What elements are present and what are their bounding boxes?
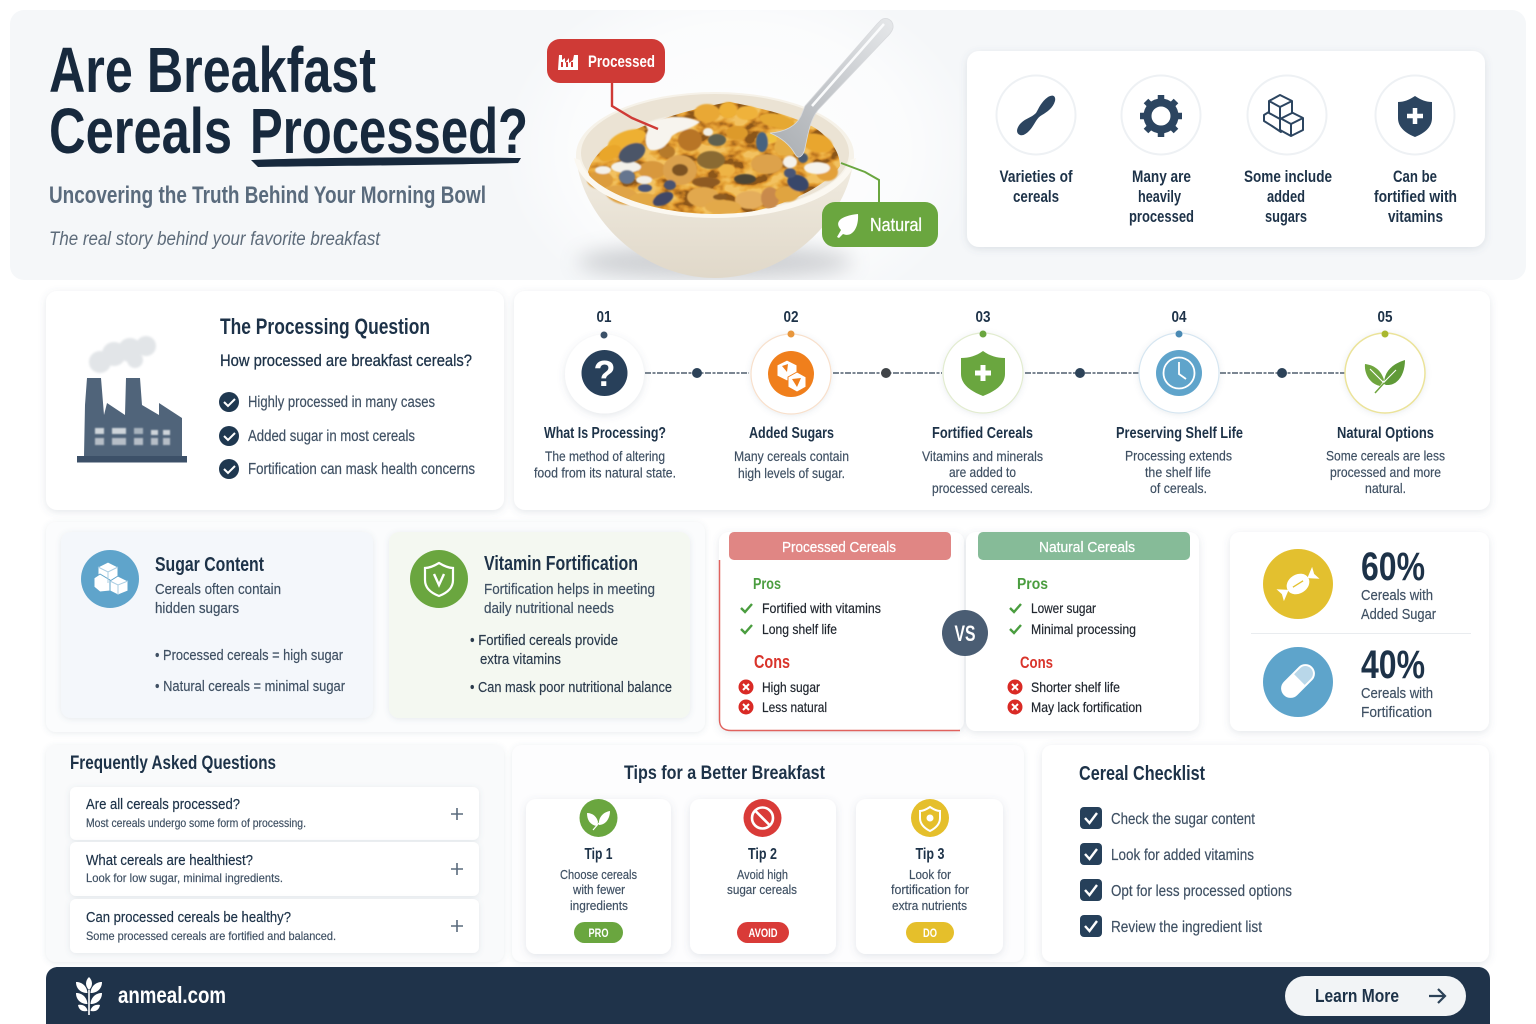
card: processed cereals: Pros: [753, 576, 781, 593]
hero panel: [10, 10, 1526, 280]
faq item 2: What cereals are healthiest?: [86, 852, 253, 869]
fact: added sugars: Some include: [1244, 168, 1332, 186]
check item 3: [1080, 879, 1292, 901]
connectors: [645, 368, 1345, 378]
stat: 60 percent: 60%: [1361, 545, 1425, 589]
step 02: 02: [784, 309, 799, 326]
tagline: The real story behind your favorite breakfast: [49, 229, 381, 250]
tip 3: [856, 799, 1003, 954]
panel: process timeline: [514, 291, 1490, 510]
card: vitamin fortification: Vitamin Fortification: [484, 553, 638, 575]
tip 1: with fewer: [572, 882, 626, 897]
icon: factory with smoke: [77, 336, 187, 462]
fact: added sugars: added: [1267, 188, 1305, 206]
panel: sugar and vitamins backdrop: [46, 522, 705, 732]
VS badge: [942, 610, 988, 656]
tip 1: PRO: [588, 926, 608, 940]
step 03: are added to: [949, 464, 1016, 480]
title: Processed?: [250, 95, 528, 167]
tip 1: ingredients: [570, 898, 628, 913]
panel: cereal checklist: [1042, 745, 1489, 962]
tip 1: Choose cereals: [560, 867, 637, 882]
step 05: [1326, 309, 1445, 496]
card: processed cereals: Cons: [754, 652, 790, 672]
faq item 3: Can processed cereals be healthy?: [86, 909, 291, 926]
tip 3: DO: [923, 926, 937, 940]
card: vitamin fortification: • Can mask poor nutritional balance: [470, 679, 672, 696]
check item 1: [1080, 807, 1255, 829]
step 03: [922, 309, 1043, 496]
check item 4: [1080, 915, 1262, 937]
panel: cereal checklist: Cereal Checklist: [1079, 763, 1205, 785]
stat: 40 percent: Fortification: [1361, 704, 1432, 721]
card: vitamin fortification: [389, 532, 690, 718]
fact: varieties: [996, 76, 1076, 206]
stat: 60 percent: Added Sugar: [1361, 606, 1436, 623]
step 01: [534, 309, 676, 480]
check item 1: Check the sugar content: [1111, 811, 1255, 828]
heading: The Processing Question: [220, 314, 430, 339]
faq item 2: [70, 842, 479, 896]
faq item 3: Some processed cereals are fortified and balanced.: [86, 929, 336, 943]
panel: FAQ: [46, 745, 504, 962]
card: sugar content: [61, 532, 373, 718]
card: vitamin fortification: • Fortified cereals provide: [470, 632, 618, 649]
callout: processed: Processed: [588, 52, 655, 71]
fact: heavily processed: processed: [1129, 208, 1194, 226]
step 02: Added Sugars: [749, 425, 834, 442]
step 01: ?: [594, 353, 616, 394]
callout line: processed: [612, 83, 658, 129]
step 05: natural.: [1365, 480, 1406, 496]
tip 3: Tip 3: [916, 846, 945, 863]
tip 3: fortification for: [891, 882, 970, 897]
card: sugar content: Cereals often contain: [155, 581, 281, 598]
VS badge: VS: [954, 621, 976, 646]
step 02: Many cereals contain: [734, 448, 849, 464]
title: Are Breakfast: [49, 34, 376, 106]
faq item 1: [70, 787, 479, 840]
fact: fortified: Can be: [1393, 168, 1437, 186]
checklist: [219, 392, 475, 479]
step 02: [734, 309, 849, 481]
step 04: of cereals.: [1150, 480, 1207, 496]
check item 4: Review the ingredient list: [1111, 919, 1262, 936]
step 01: What Is Processing?: [544, 425, 666, 442]
checklist: Added sugar in most cereals: [248, 428, 415, 445]
stat: 40 percent: Cereals with: [1361, 685, 1433, 702]
fact: added sugars: [1244, 76, 1332, 226]
card: processed cereals: [719, 532, 964, 731]
stat: 60 percent: Cereals with: [1361, 587, 1433, 604]
tip 2: [690, 799, 836, 954]
check item 2: Look for added vitamins: [1111, 847, 1254, 864]
step 05: processed and more: [1330, 464, 1441, 480]
step 05: 05: [1378, 309, 1393, 326]
stat: 60 percent: [1263, 545, 1436, 623]
fact: fortified: [1374, 76, 1457, 226]
card: natural cereals: [966, 532, 1199, 731]
icon: sugar cubes: [81, 550, 139, 608]
spoon: [770, 18, 893, 157]
faq item 1: Most cereals undergo some form of processing.: [86, 816, 306, 830]
panel: comparison: [719, 532, 1199, 731]
callout line: natural: [841, 163, 879, 202]
panel: tips: Tips for a Better Breakfast: [624, 763, 826, 784]
card: natural cereals: Pros: [1017, 576, 1048, 593]
checklist: Fortification can mask health concerns: [248, 461, 475, 478]
fact: heavily processed: heavily: [1138, 188, 1182, 206]
fact: added sugars: sugars: [1265, 208, 1307, 226]
faq item 3: [70, 899, 479, 953]
step 04: Preserving Shelf Life: [1116, 425, 1243, 442]
fact: fortified: vitamins: [1388, 208, 1443, 226]
fact: heavily processed: [1122, 76, 1200, 226]
step 01: food from its natural state.: [534, 464, 676, 480]
arrow: [1429, 989, 1445, 1003]
card: sugar content: • Natural cereals = minimal sugar: [155, 678, 345, 695]
title underline: [251, 157, 521, 167]
icon: leaf: [837, 214, 858, 238]
step 04: [1116, 309, 1243, 496]
tip 2: AVOID: [748, 926, 778, 940]
button: learn more: Learn More: [1315, 986, 1399, 1006]
card: natural cereals: Natural Cereals: [1039, 539, 1135, 556]
tip 2: Avoid high: [737, 867, 788, 882]
cereal bowl illustration: [574, 18, 893, 280]
card: sugar content: • Processed cereals = high sugar: [155, 647, 343, 664]
button: learn more: [1285, 976, 1466, 1016]
step 03: Fortified Cereals: [932, 425, 1033, 442]
checklist: Highly processed in many cases: [248, 394, 435, 411]
step 01: 01: [596, 309, 612, 326]
card: processed cereals: Long shelf life: [762, 621, 837, 637]
tip 2: sugar cereals: [727, 882, 797, 897]
fact: heavily processed: Many are: [1132, 168, 1191, 186]
icon: wheat logo: [76, 977, 102, 1015]
step 05: Natural Options: [1337, 425, 1434, 442]
card: natural cereals: May lack fortification: [1031, 699, 1142, 715]
fact: fortified: fortified with: [1374, 188, 1457, 206]
panel: statistics: [1230, 532, 1489, 731]
card: vitamin fortification: daily nutritional needs: [484, 600, 614, 617]
card: sugar content: hidden sugars: [155, 600, 239, 617]
card: processed cereals: Processed Cereals: [782, 539, 896, 556]
tip 2: Tip 2: [748, 846, 777, 863]
step 05: Some cereals are less: [1326, 448, 1445, 464]
panel: FAQ: Frequently Asked Questions: [70, 753, 276, 774]
fact: varieties: cereals: [1013, 188, 1059, 206]
tip 3: Look for: [909, 867, 952, 882]
card: processed cereals: Less natural: [762, 699, 827, 715]
stat: 40 percent: 40%: [1361, 643, 1425, 687]
footer bar: [46, 967, 1490, 1024]
tip 1: [526, 799, 671, 954]
step 04: 04: [1172, 309, 1187, 326]
title: [49, 34, 528, 167]
subheading: How processed are breakfast cereals?: [220, 351, 472, 370]
card: vitamin fortification: Fortification helps in meeting: [484, 581, 655, 598]
step 02: high levels of sugar.: [738, 465, 845, 481]
faq item 1: Are all cereals processed?: [86, 796, 240, 813]
card: natural cereals: Lower sugar: [1031, 600, 1096, 616]
tip 3: extra nutrients: [892, 898, 967, 913]
card: natural cereals: Shorter shelf life: [1031, 679, 1120, 695]
icon: factory: [558, 55, 578, 70]
card: natural cereals: Minimal processing: [1031, 621, 1136, 637]
stat: 40 percent: [1263, 643, 1433, 721]
card: vitamin fortification: extra vitamins: [480, 651, 561, 668]
title: Cereals: [49, 95, 232, 167]
card: natural cereals: Cons: [1020, 653, 1053, 672]
subtitle: Uncovering the Truth Behind Your Morning Bowl: [49, 182, 486, 209]
step 03: Vitamins and minerals: [922, 448, 1043, 464]
check item 2: [1080, 843, 1254, 865]
callout: processed: [547, 39, 665, 83]
callout: natural: Natural: [870, 215, 922, 235]
step 04: the shelf life: [1145, 464, 1211, 480]
fact: varieties: Varieties of: [1000, 168, 1073, 186]
card: processed cereals: Fortified with vitamins: [762, 600, 881, 616]
panel: tips: [512, 745, 1024, 962]
card: processed cereals: High sugar: [762, 679, 820, 695]
icon: shield: [410, 550, 468, 608]
callout: natural: [822, 202, 938, 247]
footer bar: anmeal.com: [118, 982, 226, 1008]
cereal: [588, 102, 840, 216]
step 01: The method of altering: [545, 448, 665, 464]
panel: the processing question: [46, 291, 504, 510]
tip 1: Tip 1: [584, 846, 613, 863]
panel: key facts: [967, 51, 1485, 247]
step 04: Processing extends: [1125, 448, 1232, 464]
step 03: processed cereals.: [932, 480, 1033, 496]
step 03: 03: [976, 309, 991, 326]
faq item 2: Look for low sugar, minimal ingredients.: [86, 871, 283, 885]
card: sugar content: Sugar Content: [155, 554, 264, 576]
check item 3: Opt for less processed options: [1111, 883, 1292, 900]
